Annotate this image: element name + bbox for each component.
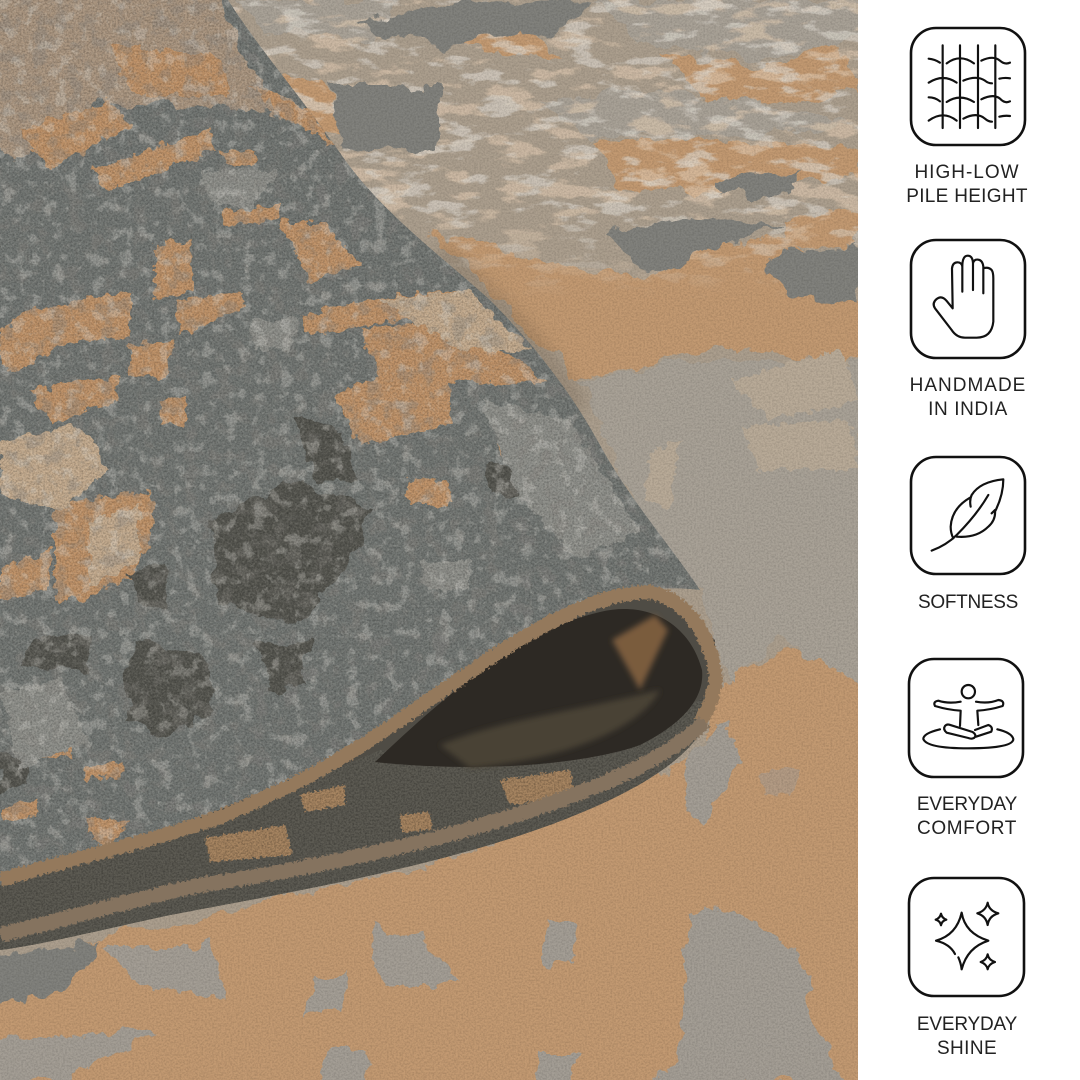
roll: dark hollow — [375, 609, 702, 767]
icon: high-low pile height — [911, 28, 1025, 145]
floor: light gray zones — [240, 0, 870, 690]
roll: backing silhouette — [0, 580, 715, 950]
icon: sparkles — [909, 878, 1024, 996]
roll: lower edge binding — [0, 722, 705, 935]
label: handmade in india: HANDMADE — [910, 375, 1026, 396]
label: everyday comfort: EVERYDAY — [917, 794, 1017, 815]
floor: dark gray patches — [0, 0, 860, 1005]
label: everyday shine: EVERYDAY — [917, 1014, 1017, 1035]
label: softness: SOFTNESS — [918, 592, 1018, 613]
roll: lower fold of rug — [0, 696, 705, 950]
label: everyday shine: SHINE — [937, 1038, 997, 1059]
label: high-low pile height: PILE HEIGHT — [906, 186, 1028, 207]
label: everyday comfort: COMFORT — [917, 818, 1017, 839]
label: high-low pile height — [906, 162, 1028, 207]
surface: top tan section — [0, 0, 310, 160]
label: handmade in india — [910, 375, 1026, 420]
surface: dark mottled patches — [0, 415, 530, 790]
label: handmade in india: IN INDIA — [928, 399, 1008, 420]
icon: meditation comfort — [909, 659, 1023, 777]
floor: peach zones — [0, 20, 870, 1080]
label: high-low pile height: HIGH-LOW — [914, 162, 1020, 183]
surface: peach patches — [0, 45, 575, 845]
roll: upper edge binding — [0, 592, 716, 880]
fold: orange flecks — [205, 770, 575, 862]
surface: beige patches — [0, 290, 530, 585]
floor: pale beige highlights — [645, 350, 860, 510]
label: everyday shine — [917, 1014, 1017, 1059]
icon: feather — [911, 457, 1025, 574]
roll: upper gray surface with blotches — [0, 0, 760, 900]
icon: hand — [911, 240, 1025, 358]
surface: gray light patches — [0, 170, 640, 770]
floor: lower gray patches — [0, 720, 840, 1080]
photo: rolled rug on matching rug — [0, 0, 858, 1080]
hollow: inner tan glimpse — [440, 615, 668, 768]
label: everyday comfort — [917, 794, 1017, 839]
floor: shadow along roll — [440, 250, 580, 410]
floor: upper flecks — [230, 0, 858, 300]
